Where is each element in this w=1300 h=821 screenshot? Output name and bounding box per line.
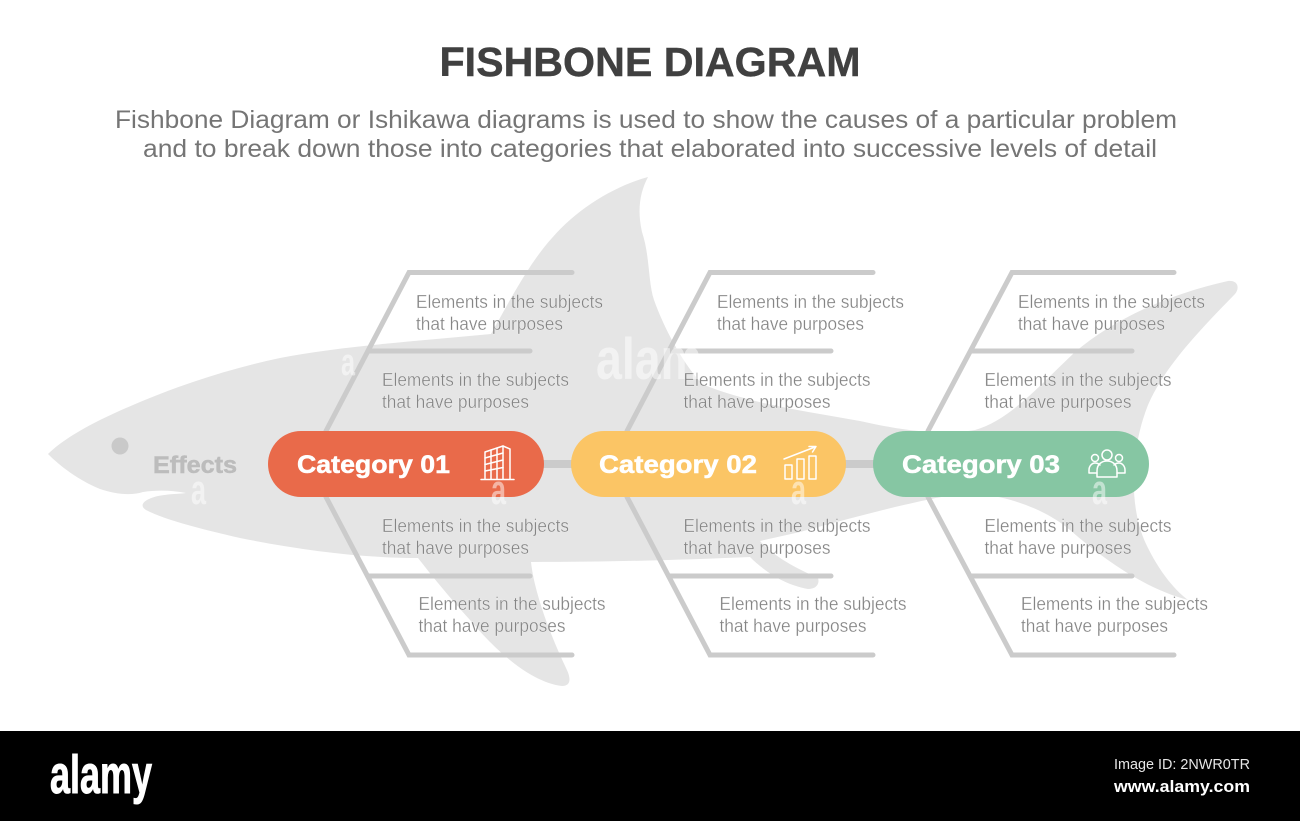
lower bones 03 — [928, 497, 1174, 655]
element texts 03: Elements in the subjects — [984, 516, 1172, 536]
element texts 01: that have purposes — [382, 538, 529, 558]
effects label: Effects — [153, 452, 237, 479]
lower bones 01 — [326, 497, 572, 655]
upper bones 02 — [627, 272, 873, 431]
pill: category 02 — [571, 431, 846, 497]
watermark marks: a — [791, 466, 806, 513]
subtitle text — [115, 106, 1177, 163]
element texts 01: Elements in the subjects — [382, 516, 569, 536]
element texts 01 — [382, 292, 606, 636]
element texts 02: Elements in the subjects — [720, 594, 906, 614]
pill: category 01: Category 01 — [297, 451, 450, 479]
element texts 03: Elements in the subjects — [984, 370, 1172, 390]
title: FISHBONE DIAGRAM — [440, 39, 860, 85]
element texts 02 — [684, 292, 906, 636]
element texts 02: that have purposes — [717, 314, 864, 334]
element texts 01: that have purposes — [418, 616, 566, 636]
pill: category 03 — [873, 431, 1149, 497]
pill: category 02: Category 02 — [599, 451, 757, 479]
element texts 03 — [984, 292, 1208, 636]
element texts 02: that have purposes — [720, 616, 866, 636]
element texts 03: that have purposes — [984, 538, 1132, 558]
element texts 03: that have purposes — [1021, 616, 1168, 636]
watermark marks: a — [341, 342, 356, 384]
element texts 02: Elements in the subjects — [684, 516, 870, 536]
website: www.alamy.com — [1113, 777, 1250, 796]
upper bones 01 — [326, 272, 572, 431]
spine connectors — [540, 460, 878, 468]
element texts 03: Elements in the subjects — [1021, 594, 1208, 614]
watermark marks: alam — [596, 327, 702, 392]
element texts 03: that have purposes — [1018, 314, 1165, 334]
fishbone group: category 02 — [627, 272, 906, 655]
image id: Image ID: 2NWR0TR — [1114, 756, 1250, 773]
subtitle text: Fishbone Diagram or Ishikawa diagrams is used to show the causes of a particular problem — [115, 106, 1177, 134]
watermark marks: a — [491, 466, 506, 513]
fishbone group: category 03 — [928, 272, 1208, 655]
pill: category 01 — [268, 431, 544, 497]
subtitle text: and to break down those into categories that elaborated into successive levels of detail — [143, 135, 1157, 163]
element texts 01: Elements in the subjects — [416, 292, 603, 312]
element texts 02: that have purposes — [684, 538, 830, 558]
fishbone group: category 01 — [326, 272, 606, 655]
element texts 01: that have purposes — [416, 314, 563, 334]
element texts 01: that have purposes — [382, 392, 529, 412]
element texts 01: Elements in the subjects — [418, 594, 606, 614]
footer logo: alamy — [50, 745, 152, 805]
shark silhouette background — [48, 177, 1238, 686]
shark eye — [112, 438, 128, 454]
element texts 02: that have purposes — [684, 392, 830, 412]
watermark marks — [191, 327, 1107, 513]
footer bar — [0, 731, 1300, 821]
icon: people group — [1089, 450, 1125, 477]
element texts 03: Elements in the subjects — [1018, 292, 1205, 312]
upper bones 03 — [928, 272, 1174, 431]
element texts 02: Elements in the subjects — [684, 370, 870, 390]
element texts 01: Elements in the subjects — [382, 370, 569, 390]
pill: category 03: Category 03 — [902, 451, 1060, 479]
element texts 02: Elements in the subjects — [717, 292, 904, 312]
icon: building — [481, 446, 514, 480]
watermark marks: a — [191, 466, 206, 513]
element texts 03: that have purposes — [984, 392, 1132, 412]
icon: bar chart with arrow — [784, 446, 816, 479]
lower bones 02 — [627, 497, 873, 655]
watermark marks: a — [1092, 466, 1107, 513]
